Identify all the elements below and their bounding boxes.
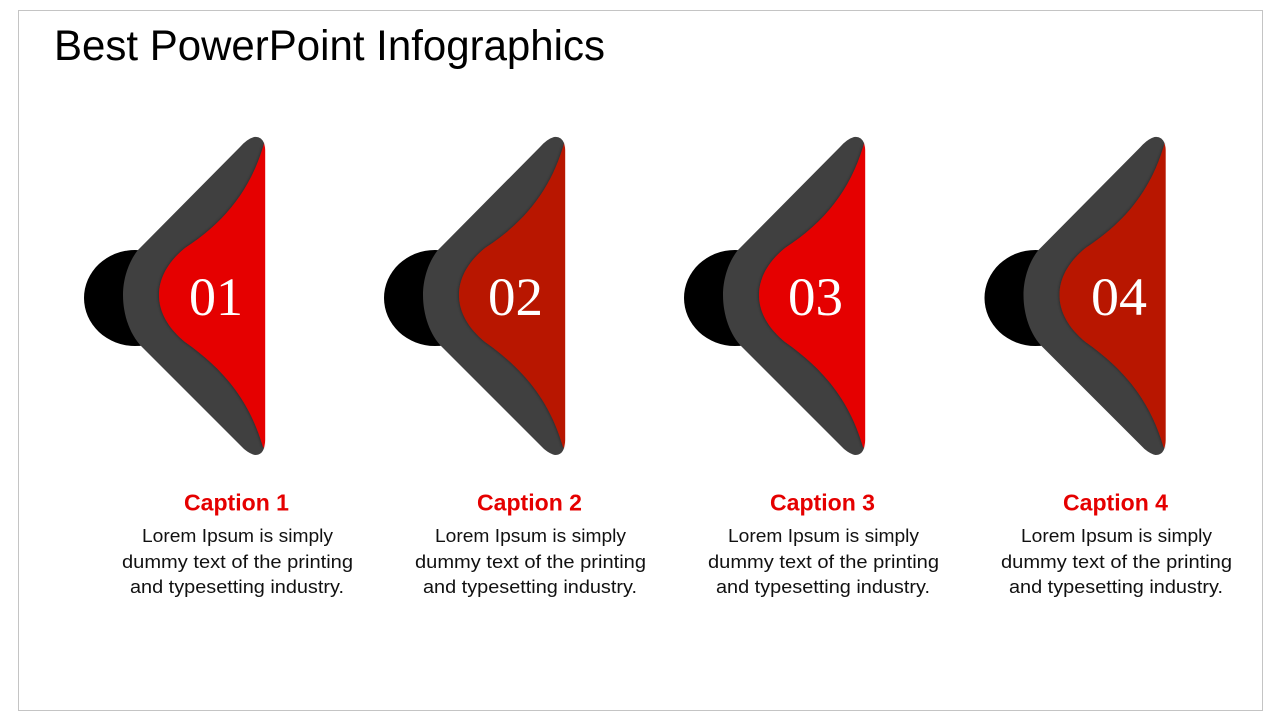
icon: dark red wedge	[459, 143, 566, 448]
icon: gray chevron	[123, 137, 264, 455]
panel: step 01	[84, 137, 266, 455]
caption block 3	[708, 490, 939, 597]
icon: red wedge	[159, 143, 266, 448]
caption text 4: Lorem Ipsum is simply	[1021, 525, 1213, 546]
caption text 3: dummy text of the printing	[708, 551, 939, 572]
caption block 2	[415, 490, 646, 597]
icon: black circle	[984, 250, 1086, 346]
number 04: 04	[1091, 267, 1147, 327]
caption text 1: Lorem Ipsum is simply	[142, 525, 334, 546]
caption heading 4: Caption 4	[1063, 490, 1168, 516]
caption text 4: dummy text of the printing	[1001, 551, 1232, 572]
number 03: 03	[788, 267, 843, 327]
icon: black circle	[684, 250, 786, 346]
icon: gray chevron	[423, 137, 564, 455]
number 02: 02	[488, 267, 543, 327]
caption text 1: dummy text of the printing	[122, 551, 353, 572]
icon: gray chevron	[1024, 137, 1164, 455]
caption text 2: and typesetting industry.	[423, 576, 637, 597]
caption heading 1: Caption 1	[184, 490, 289, 516]
caption text 2: Lorem Ipsum is simply	[435, 525, 627, 546]
caption heading 2: Caption 2	[477, 490, 582, 516]
panel: step 02	[384, 137, 566, 455]
caption text 2: dummy text of the printing	[415, 551, 646, 572]
caption block 1	[122, 490, 353, 597]
caption text 2	[415, 525, 646, 597]
caption block 4	[1001, 490, 1232, 597]
caption text 4: and typesetting industry.	[1009, 576, 1223, 597]
icon: gray chevron	[723, 137, 864, 455]
caption text 3: and typesetting industry.	[716, 576, 930, 597]
icon: dark red wedge	[1060, 143, 1166, 448]
caption text 3: Lorem Ipsum is simply	[728, 525, 920, 546]
caption text 4	[1001, 525, 1232, 597]
panel: step 03	[684, 137, 866, 455]
icon: black circle	[84, 250, 186, 346]
icon: black circle	[384, 250, 486, 346]
icon: red wedge	[759, 143, 866, 448]
number 01: 01	[189, 267, 243, 327]
caption text 3	[708, 525, 939, 597]
caption text 1: and typesetting industry.	[130, 576, 344, 597]
caption heading 3: Caption 3	[770, 490, 875, 516]
caption text 1	[122, 525, 353, 597]
panel: step 04	[984, 137, 1166, 455]
title: Best PowerPoint Infographics	[54, 22, 605, 70]
